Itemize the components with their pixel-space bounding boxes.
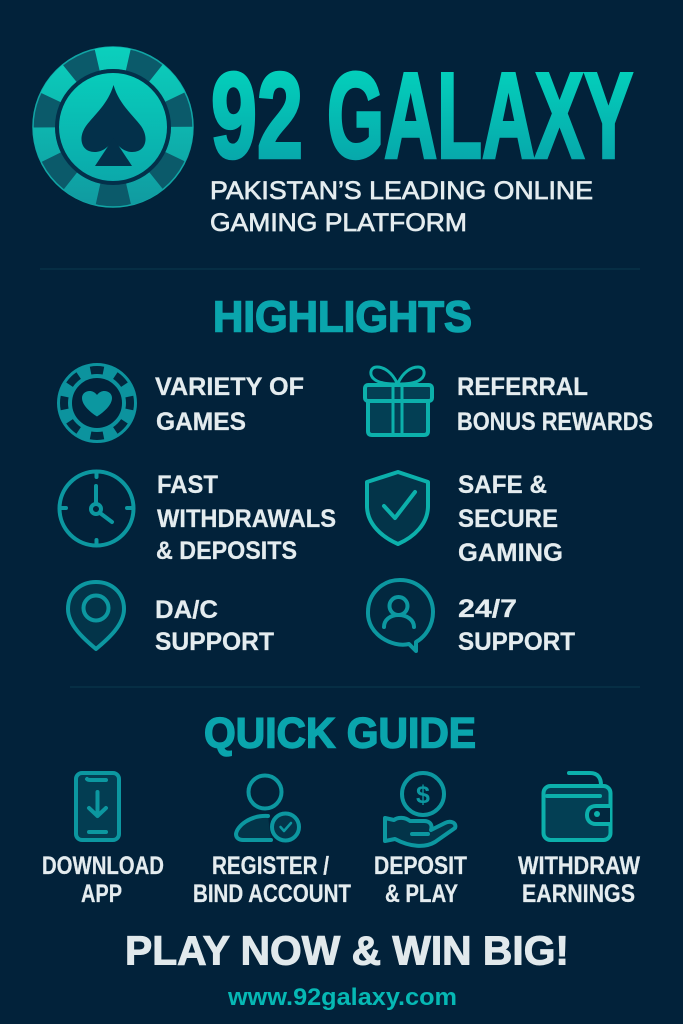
text — [193, 852, 351, 908]
subtitle: PAKISTAN’S LEADING ONLINE — [210, 177, 593, 205]
text: DA/C — [155, 596, 218, 624]
icon: chat bubble with person — [368, 580, 433, 651]
text — [42, 852, 164, 908]
website url: www.92galaxy.com — [227, 984, 457, 1011]
text: SAFE & — [458, 471, 547, 499]
heading: quick guide: QUICK GUIDE — [204, 710, 476, 758]
text — [458, 471, 563, 567]
text — [518, 852, 640, 908]
text: WITHDRAW — [518, 852, 640, 880]
text: BIND ACCOUNT — [193, 880, 351, 908]
text: SUPPORT — [458, 628, 575, 656]
text: GAMES — [156, 408, 246, 436]
icon: clock — [60, 472, 134, 546]
text: WITHDRAWALS — [157, 505, 336, 533]
highlight: referral bonus — [365, 367, 653, 436]
text — [458, 595, 575, 656]
text: GAMING — [458, 539, 563, 567]
text: REGISTER / — [212, 852, 329, 880]
text: DOWNLOAD — [42, 852, 164, 880]
text: FAST — [157, 471, 218, 499]
icon: phone — [76, 773, 119, 840]
text: BONUS REWARDS — [457, 408, 653, 436]
step: register — [193, 776, 351, 908]
highlight: variety of games — [58, 364, 304, 442]
text: & PLAY — [385, 880, 458, 908]
text: REFERRAL — [457, 373, 588, 401]
text — [374, 852, 467, 908]
title: 92 GALAXY — [211, 48, 633, 184]
logo: poker chip with spade — [30, 44, 196, 210]
text: EARNINGS — [522, 880, 635, 908]
text — [155, 596, 274, 656]
subtitle — [210, 177, 593, 237]
icon: wallet — [544, 773, 610, 840]
icon: shield — [367, 472, 428, 544]
text: SUPPORT — [155, 628, 274, 656]
icon: gift — [365, 367, 432, 435]
text: & DEPOSITS — [156, 537, 297, 565]
text: 24/7 — [458, 595, 517, 623]
highlight: DA/C support — [68, 582, 274, 656]
step: withdraw earnings — [518, 773, 640, 908]
text — [457, 373, 653, 436]
highlight: 24/7 support — [368, 580, 575, 656]
subtitle: GAMING PLATFORM — [210, 209, 467, 237]
text: APP — [81, 880, 122, 908]
icon: user with check badge — [236, 776, 299, 840]
text — [156, 471, 336, 565]
highlight: fast withdrawals — [60, 471, 336, 565]
step: download app — [42, 773, 164, 908]
call to action: PLAY NOW & WIN BIG! — [125, 928, 569, 974]
step: deposit and play — [374, 773, 467, 908]
text — [155, 373, 304, 436]
heading: highlights: HIGHLIGHTS — [213, 292, 472, 342]
icon: map pin — [68, 582, 124, 649]
icon: chip with heart — [58, 364, 136, 442]
text: SECURE — [458, 505, 558, 533]
text: DEPOSIT — [374, 852, 467, 880]
highlight: safe and secure — [367, 471, 563, 567]
text: VARIETY OF — [155, 373, 304, 401]
title: 92 GALAXY: 92 — [211, 48, 303, 184]
icon: coin over hand: $ — [416, 781, 430, 809]
